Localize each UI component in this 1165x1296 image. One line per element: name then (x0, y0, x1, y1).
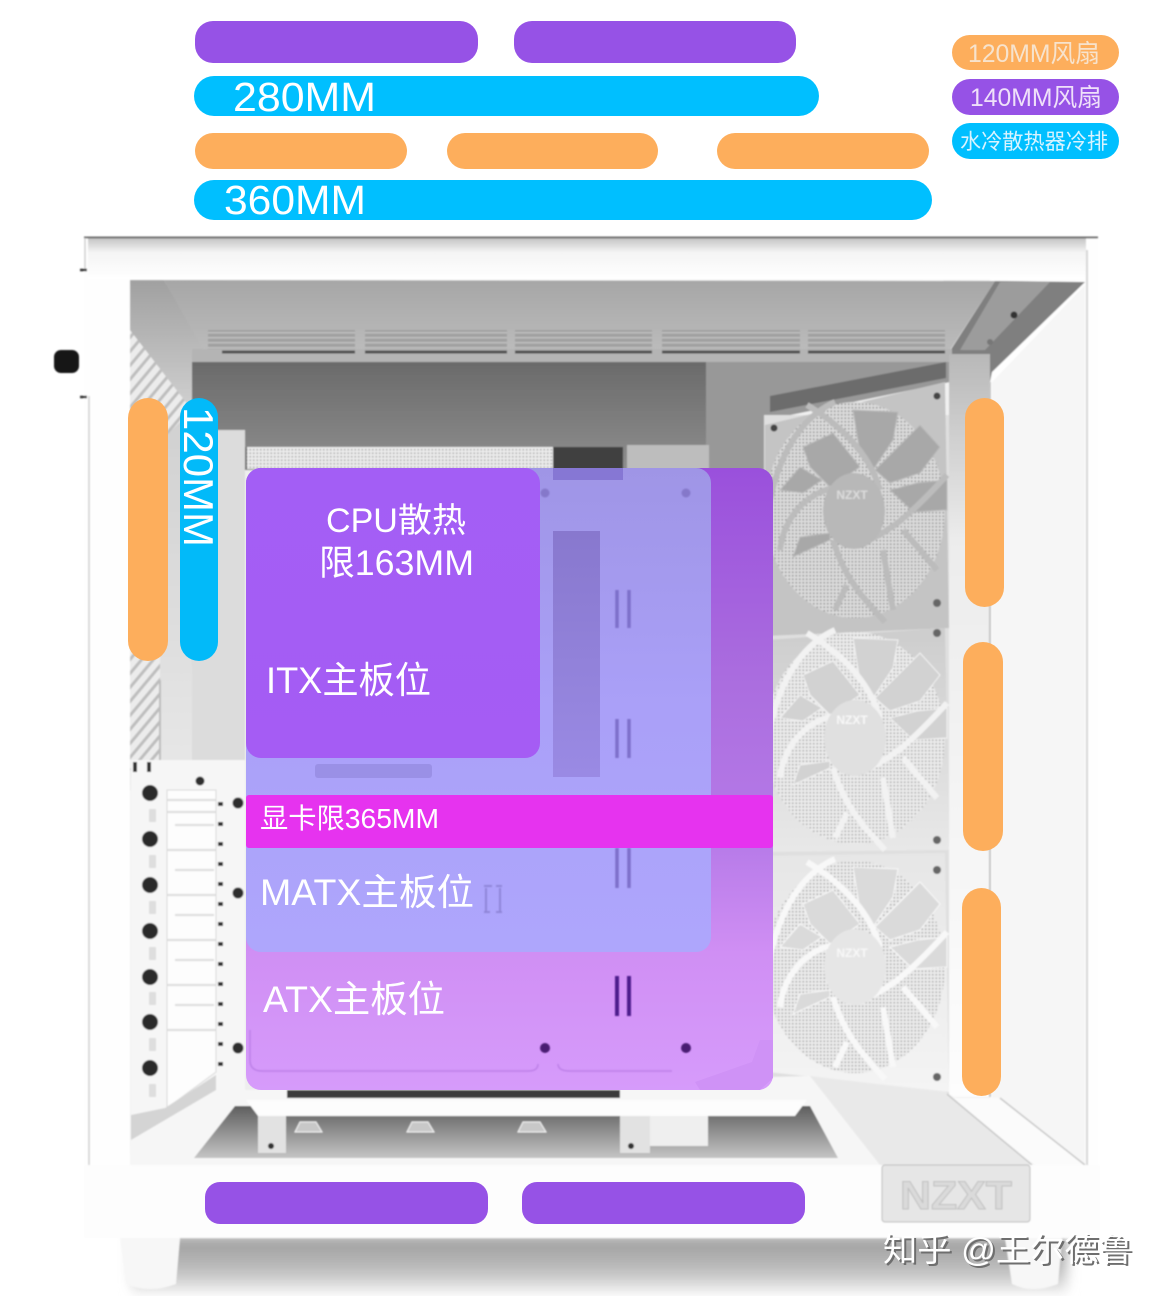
slot tabs (149, 809, 156, 1097)
ATX label: ATX主板位 (263, 979, 445, 1020)
floor (130, 1075, 1085, 1165)
board column detail (553, 531, 600, 777)
front fan bar bottom (962, 888, 1001, 1096)
rear 120mm radiator bar (175, 398, 222, 661)
floor shadow (132, 1236, 1067, 1292)
legend: radiator: 水冷散热器冷排 (960, 130, 1108, 154)
top 120mm fan bar left (195, 133, 407, 169)
lower board bar (315, 764, 432, 778)
front right floor panel (810, 1076, 1030, 1165)
interior window (130, 280, 990, 1165)
left corner wall (130, 280, 245, 790)
ATX lower bracket shape (695, 1040, 773, 1090)
NZXT badge: NZXT (900, 1174, 1012, 1218)
case photo (54, 237, 1100, 1292)
tray screws (133, 762, 244, 1066)
CPU cooler limit label: CPU散热 (326, 502, 466, 540)
MATX motherboard zone (246, 468, 711, 952)
360mm radiator bar (194, 177, 932, 223)
top 140mm fan bar left (195, 21, 478, 63)
rear expansion area (131, 760, 245, 1115)
right glass region (992, 285, 1085, 1165)
watermark: 知乎 @王尔德鲁 (883, 1231, 1133, 1268)
top 140mm fan bar right (514, 21, 796, 63)
bottom 140mm fan bar right (522, 1182, 805, 1224)
280mm radiator bar (194, 74, 819, 120)
rear vent mesh (247, 447, 553, 469)
280mm radiator bar: 280MM (233, 74, 376, 120)
legend: radiator (952, 123, 1119, 159)
top edge line (84, 236, 1098, 238)
bottom 140mm fan bar left (205, 1182, 488, 1224)
top 120mm fan bar center (447, 133, 658, 169)
cable slot through overlay (553, 468, 623, 480)
bottom left floor shade (131, 1075, 216, 1140)
front bottom panel (84, 1165, 1100, 1238)
360mm radiator bar: 360MM (224, 177, 366, 223)
top-right screws (987, 312, 1018, 345)
left foot (120, 1238, 180, 1289)
top-right channel (948, 281, 1085, 382)
top 120mm fan bar right (717, 133, 929, 169)
NZXT badge (882, 1165, 1030, 1222)
MATX label: MATX主板位 (260, 872, 474, 913)
CPU cooler limit value: 限163MM (319, 544, 474, 583)
fan hub logos: NZXT (836, 713, 868, 727)
power button (54, 350, 79, 373)
vent dark strips (222, 350, 945, 354)
motherboard tray (245, 470, 772, 1110)
legend: 120mm fan (952, 35, 1119, 70)
fan 1 (765, 382, 949, 636)
ATX motherboard zone (246, 468, 773, 1090)
ITX label: ITX主板位 (266, 660, 431, 701)
rear 120mm radiator bar: 120MM (175, 407, 222, 547)
dark cable slot (553, 447, 623, 477)
top panel (164, 280, 995, 353)
fan 3 (765, 853, 949, 1092)
fan hub logos (836, 488, 868, 960)
front fan bar top (965, 398, 1004, 607)
front floor strip (951, 1098, 1085, 1165)
fan hub logos: NZXT (836, 488, 868, 502)
back wall (192, 362, 706, 470)
top vents (208, 330, 945, 349)
expansion thumbscrews (142, 785, 158, 1076)
side button housing marks (80, 270, 87, 397)
watermark: 知乎 @王尔德鲁 (885, 1233, 1135, 1270)
right vertical edge (1086, 250, 1088, 1165)
front fan bar middle (963, 642, 1003, 851)
top band (88, 238, 1086, 279)
side vertical bands (160, 430, 193, 790)
right foot (1005, 1238, 1062, 1289)
shelf supports (258, 1116, 708, 1153)
case outer frame (84, 237, 1098, 1166)
tray outline (250, 1030, 672, 1071)
rear vent grommet (224, 447, 254, 473)
top rail (192, 349, 952, 362)
graphics card limit band (246, 795, 773, 848)
fan 2 (765, 628, 949, 852)
expansion slot covers (167, 790, 216, 1108)
black psu gap (287, 1090, 620, 1098)
perforated side (130, 330, 192, 770)
fan hub logos: NZXT (836, 946, 868, 960)
faint logo marks (484, 886, 502, 912)
vertical fan column backing (764, 415, 950, 1095)
dark stripe above fans (770, 362, 946, 412)
graphics card limit band: 显卡限365MM (260, 803, 439, 834)
ITX motherboard zone (246, 468, 540, 758)
light top block (627, 445, 709, 475)
shelf (246, 1100, 807, 1116)
left frame line (85, 238, 89, 1165)
legend: 140mm fan: 140MM风扇 (970, 84, 1102, 112)
post edge line (989, 382, 991, 1097)
legend: 120mm fan: 120MM风扇 (968, 40, 1100, 68)
front post (949, 354, 990, 1097)
tray side column (192, 430, 245, 790)
floor edge lines (947, 1094, 1085, 1165)
motherboard standoffs and slots (250, 488, 691, 1071)
legend: 140mm fan (952, 79, 1119, 115)
right recess (706, 362, 950, 480)
rear 120mm fan bar (128, 398, 168, 661)
bottom opening (194, 1106, 838, 1158)
top-right inner rail (960, 282, 1050, 350)
legend (952, 35, 1119, 159)
